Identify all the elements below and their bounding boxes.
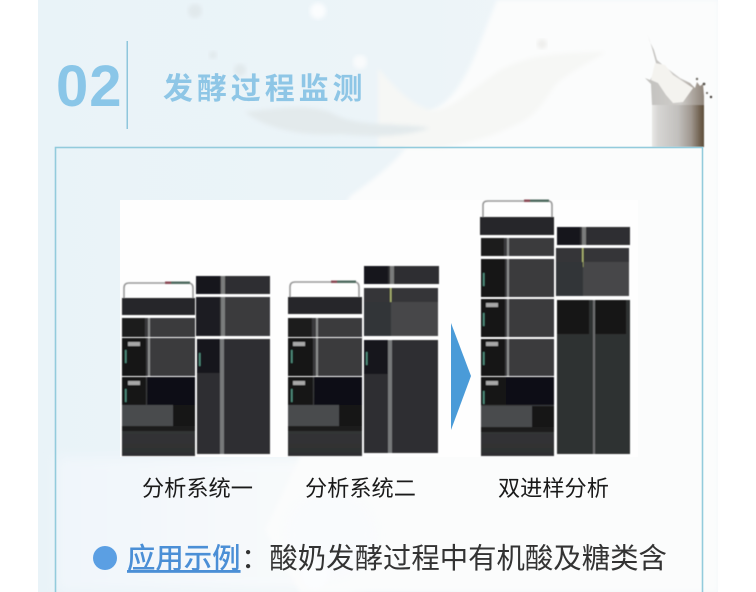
icon: milk glass with splash [645, 35, 712, 147]
section number: 02 [56, 54, 123, 119]
icon: dual injection system [480, 200, 630, 456]
divider line [126, 41, 128, 129]
label: system one: 分析系统一 [142, 476, 253, 501]
panel: instrument photo background [120, 200, 638, 457]
icon: analysis system two [288, 266, 439, 456]
icon: analysis system one [122, 276, 270, 456]
application example text: ：酸奶发酵过程中有机酸及糖类含 [241, 543, 667, 575]
title: 发酵过程监测 [163, 73, 366, 106]
panel: content frame [56, 148, 702, 592]
label: dual injection: 双进样分析 [498, 476, 609, 501]
arrow [451, 323, 471, 430]
label: system two: 分析系统二 [305, 476, 416, 501]
application example bullet [93, 546, 117, 570]
application example heading: 应用示例 [127, 543, 241, 575]
